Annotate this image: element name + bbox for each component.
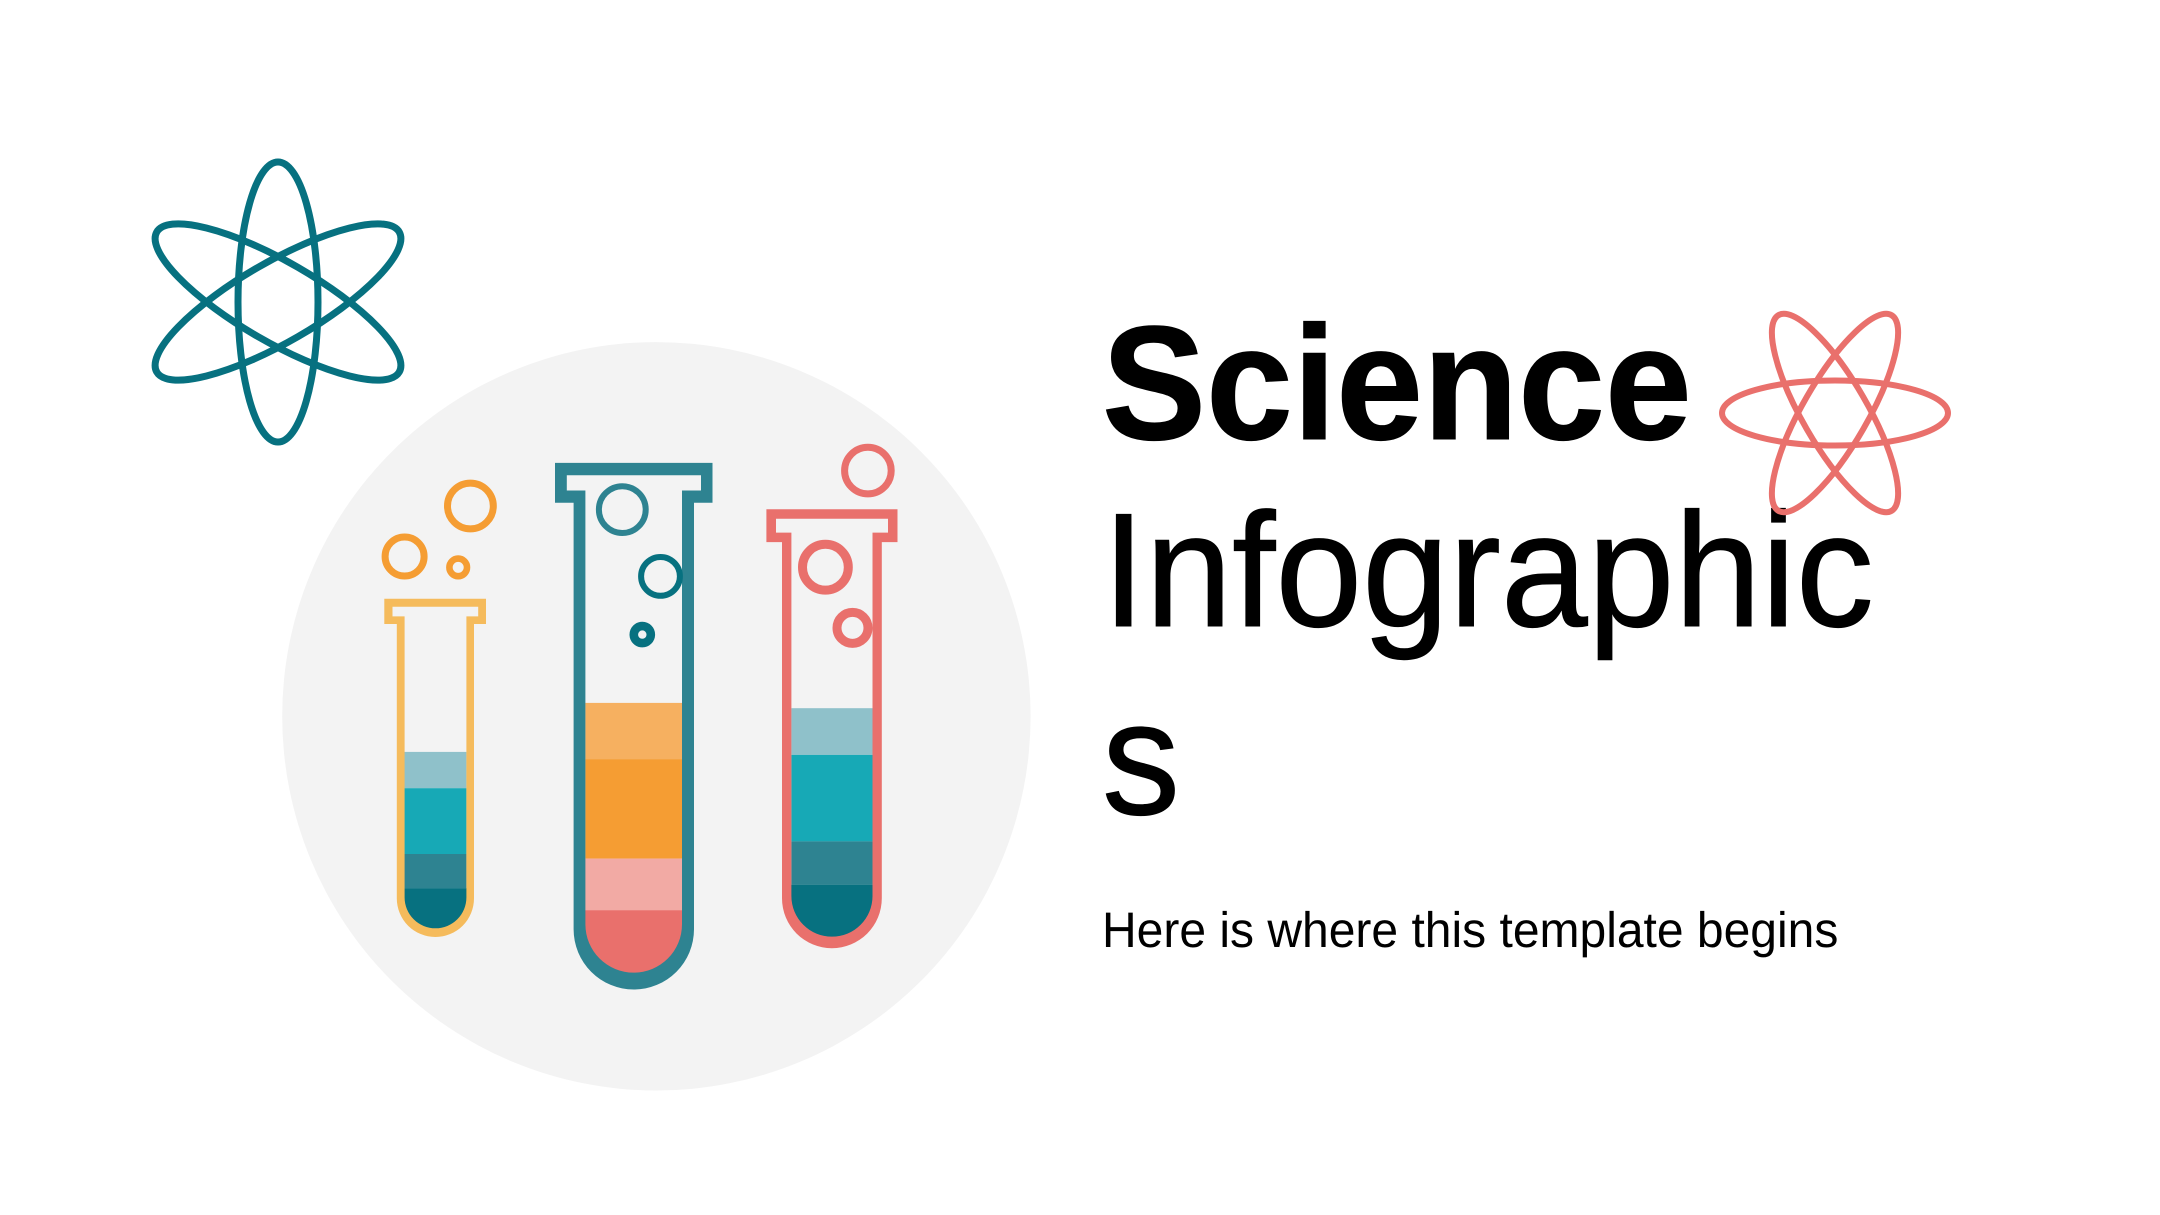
title [1102,293,1874,849]
test tube: yellow [384,483,493,937]
bubbles: orange [385,483,493,576]
liquid layers: yellow tube [404,752,467,929]
title: s [1102,668,1180,849]
background circle [282,342,1031,1090]
tube outline: yellow [384,599,486,937]
test tube: teal [555,463,712,989]
liquid layers: red tube [791,708,873,937]
subtitle: Here is where this template begins [1102,903,1838,958]
test tube: red [766,447,898,948]
tube outline: teal [555,463,712,989]
title: Science [1102,293,1692,474]
bubbles: teal [599,486,680,643]
bubbles: red [802,447,891,643]
icon: teal atom [137,162,419,442]
liquid layers: teal tube [584,703,682,973]
tube outline: red [766,509,898,948]
icon: red atom [1722,299,1948,527]
title: Infographic [1102,480,1874,661]
